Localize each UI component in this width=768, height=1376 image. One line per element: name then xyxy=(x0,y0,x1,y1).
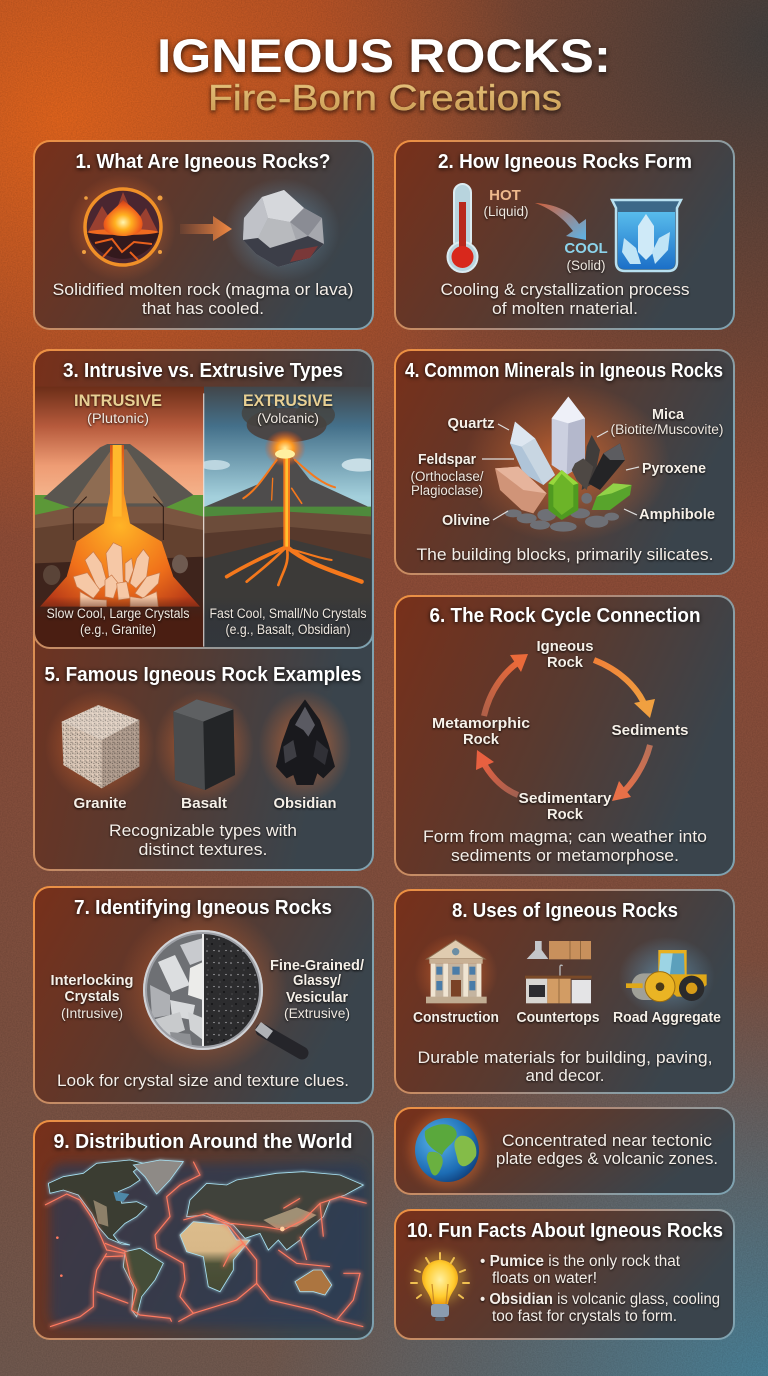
caption: extrusive xyxy=(210,606,367,637)
caption: extrusive: Fast Cool, Small/No Crystals xyxy=(210,606,367,621)
rock labels xyxy=(74,795,336,812)
icon: earth globe xyxy=(409,1112,485,1188)
illustration: crystal cluster xyxy=(463,383,670,543)
icon: granite cube xyxy=(62,705,139,788)
mineral labels: Mica xyxy=(652,406,685,423)
icon: lava circle xyxy=(68,174,176,282)
heading 9: 9. Distribution Around the World xyxy=(54,1131,352,1153)
icon: solid rock xyxy=(224,178,340,282)
facts list: • Obsidian is volcanic glass, cooling xyxy=(480,1291,720,1308)
label: extrusive texture: Vesicular xyxy=(286,989,348,1006)
rock labels: Obsidian xyxy=(274,795,336,812)
text: tectonic note: plate edges & volcanic zones. xyxy=(496,1150,718,1168)
heading 7: 7. Identifying Igneous Rocks xyxy=(74,897,332,919)
extrusive label: EXTRUSIVE xyxy=(243,391,333,410)
icon: building xyxy=(414,933,498,1013)
text 6 xyxy=(423,828,707,865)
cycle labels: Sedimentary xyxy=(518,790,612,807)
heading 8: 8. Uses of Igneous Rocks xyxy=(452,900,678,922)
label: intrusive crystals: (Intrusive) xyxy=(61,1006,123,1021)
cycle labels xyxy=(432,638,688,823)
panel: 1 what are igneous rocks xyxy=(34,141,373,329)
mineral labels: Quartz xyxy=(448,415,494,432)
rock labels: Basalt xyxy=(181,795,227,812)
mineral labels: Feldspar xyxy=(418,451,476,468)
intrusive label xyxy=(74,391,162,426)
extrusive label xyxy=(243,391,333,426)
panel: tectonic note xyxy=(395,1108,734,1194)
diagram: intrusive vs extrusive xyxy=(33,387,378,650)
title: Fire-Born Creations xyxy=(208,77,562,118)
label: intrusive crystals: Crystals xyxy=(64,988,120,1005)
intrusive label: (Plutonic) xyxy=(87,411,149,426)
use labels: Road Aggregate xyxy=(613,1009,721,1026)
facts list: • Pumice is the only rock that xyxy=(480,1253,681,1270)
mineral labels: (Orthoclase/ xyxy=(410,469,484,484)
caption: intrusive: (e.g., Granite) xyxy=(80,622,156,637)
arrow: hot to cool xyxy=(535,203,586,240)
text: tectonic note xyxy=(496,1132,718,1168)
intrusive label: INTRUSIVE xyxy=(74,391,162,410)
mineral labels: Amphibole xyxy=(639,506,715,523)
panel: 3 and 5 combined card xyxy=(33,350,378,870)
cycle labels: Rock xyxy=(463,731,500,748)
heading 6: 6. The Rock Cycle Connection xyxy=(430,605,700,627)
rock labels: Granite xyxy=(74,795,126,812)
caption: extrusive: (e.g., Basalt, Obsidian) xyxy=(226,622,350,637)
icon: kitchen countertops xyxy=(525,941,592,1003)
use labels: Construction xyxy=(413,1009,499,1026)
cycle labels: Metamorphic xyxy=(432,715,530,732)
panel: 10 fun facts xyxy=(395,1210,734,1339)
icon: basalt column xyxy=(173,699,235,790)
panel: 8 uses xyxy=(395,890,734,1093)
use labels xyxy=(413,1009,721,1026)
cycle labels: Igneous xyxy=(536,638,594,655)
label: extrusive texture: Fine-Grained/ xyxy=(270,957,365,974)
text 6: sediments or metamorphose. xyxy=(451,847,679,865)
arrow: lava to rock xyxy=(180,216,232,241)
mineral labels: Olivine xyxy=(442,512,490,529)
text 7: Look for crystal size and texture clues. xyxy=(57,1072,349,1090)
text 4: The building blocks, primarily silicates. xyxy=(416,546,714,564)
facts list: too fast for crystals to form. xyxy=(492,1308,677,1325)
text 1: Solidified molten rock (magma or lava) xyxy=(52,281,354,299)
caption: intrusive: Slow Cool, Large Crystals xyxy=(46,606,190,621)
icon: road roller xyxy=(618,937,715,1017)
label: extrusive texture: (Extrusive) xyxy=(284,1006,350,1021)
panel: 6 rock cycle xyxy=(395,596,734,875)
cycle arrows xyxy=(476,654,655,801)
mineral labels: Pyroxene xyxy=(642,460,706,477)
text 8 xyxy=(418,1049,712,1085)
text 1: that has cooled. xyxy=(142,300,264,318)
text 6: Form from magma; can weather into xyxy=(423,828,707,846)
panel: 4 common minerals xyxy=(395,350,734,574)
hot label: HOT xyxy=(489,187,521,204)
label: extrusive texture xyxy=(270,957,365,1021)
text 5 xyxy=(109,822,297,859)
text 5: distinct textures. xyxy=(138,841,268,859)
icon: magnifying glass xyxy=(118,905,302,1075)
rock examples xyxy=(45,690,352,803)
scene: intrusive xyxy=(33,387,204,650)
cycle labels: Rock xyxy=(547,806,584,823)
hot label: (Liquid) xyxy=(483,204,529,219)
text 8: Durable materials for building, paving, xyxy=(418,1049,712,1067)
panel 3 border xyxy=(34,350,373,648)
text 1 xyxy=(52,281,354,318)
heading 2: 2. How Igneous Rocks Form xyxy=(438,151,692,173)
heading 10: 10. Fun Facts About Igneous Rocks xyxy=(407,1220,723,1242)
text 2: Cooling & crystallization process xyxy=(440,281,690,299)
text 5: Recognizable types with xyxy=(109,822,297,840)
cool label: (Solid) xyxy=(566,258,606,273)
mineral labels xyxy=(410,406,724,529)
title xyxy=(157,29,611,118)
heading 1: 1. What Are Igneous Rocks? xyxy=(76,151,330,173)
panel: 2 how igneous rocks form xyxy=(395,141,734,329)
text 2 xyxy=(440,281,690,318)
scene: extrusive xyxy=(200,387,378,650)
label: intrusive crystals xyxy=(50,972,134,1021)
title: IGNEOUS ROCKS: xyxy=(157,29,611,82)
heading 3: 3. Intrusive vs. Extrusive Types xyxy=(63,360,343,382)
cycle labels: Sediments xyxy=(612,722,688,739)
mineral labels: (Biotite/Muscovite) xyxy=(610,422,724,437)
heading 4: 4. Common Minerals in Igneous Rocks xyxy=(405,360,723,382)
cool label xyxy=(564,240,608,273)
icon: obsidian arrowhead xyxy=(276,699,335,785)
panel: 9 distribution xyxy=(34,1121,373,1339)
facts list: floats on water! xyxy=(492,1270,597,1287)
icon: light bulb xyxy=(411,1252,469,1321)
label: intrusive crystals: Interlocking xyxy=(50,972,134,989)
label: extrusive texture: Glassy/ xyxy=(293,972,342,989)
hot label xyxy=(483,187,529,219)
mineral labels: Plagioclase) xyxy=(411,483,483,498)
text 2: of molten rnaterial. xyxy=(492,300,638,318)
icon: beaker with crystals xyxy=(612,200,681,271)
world map xyxy=(45,1160,367,1327)
panel: 7 identifying xyxy=(34,887,373,1103)
cool label: COOL xyxy=(564,240,608,257)
extrusive label: (Volcanic) xyxy=(257,411,319,426)
cycle labels: Rock xyxy=(547,654,584,671)
use icons xyxy=(414,933,715,1017)
text 8: and decor. xyxy=(526,1067,604,1085)
use labels: Countertops xyxy=(516,1009,600,1026)
icon: thermometer xyxy=(448,184,478,272)
heading 5: 5. Famous Igneous Rock Examples xyxy=(44,664,362,686)
facts list xyxy=(480,1253,720,1325)
caption: intrusive xyxy=(46,606,190,637)
text: tectonic note: Concentrated near tectonic xyxy=(502,1132,712,1150)
